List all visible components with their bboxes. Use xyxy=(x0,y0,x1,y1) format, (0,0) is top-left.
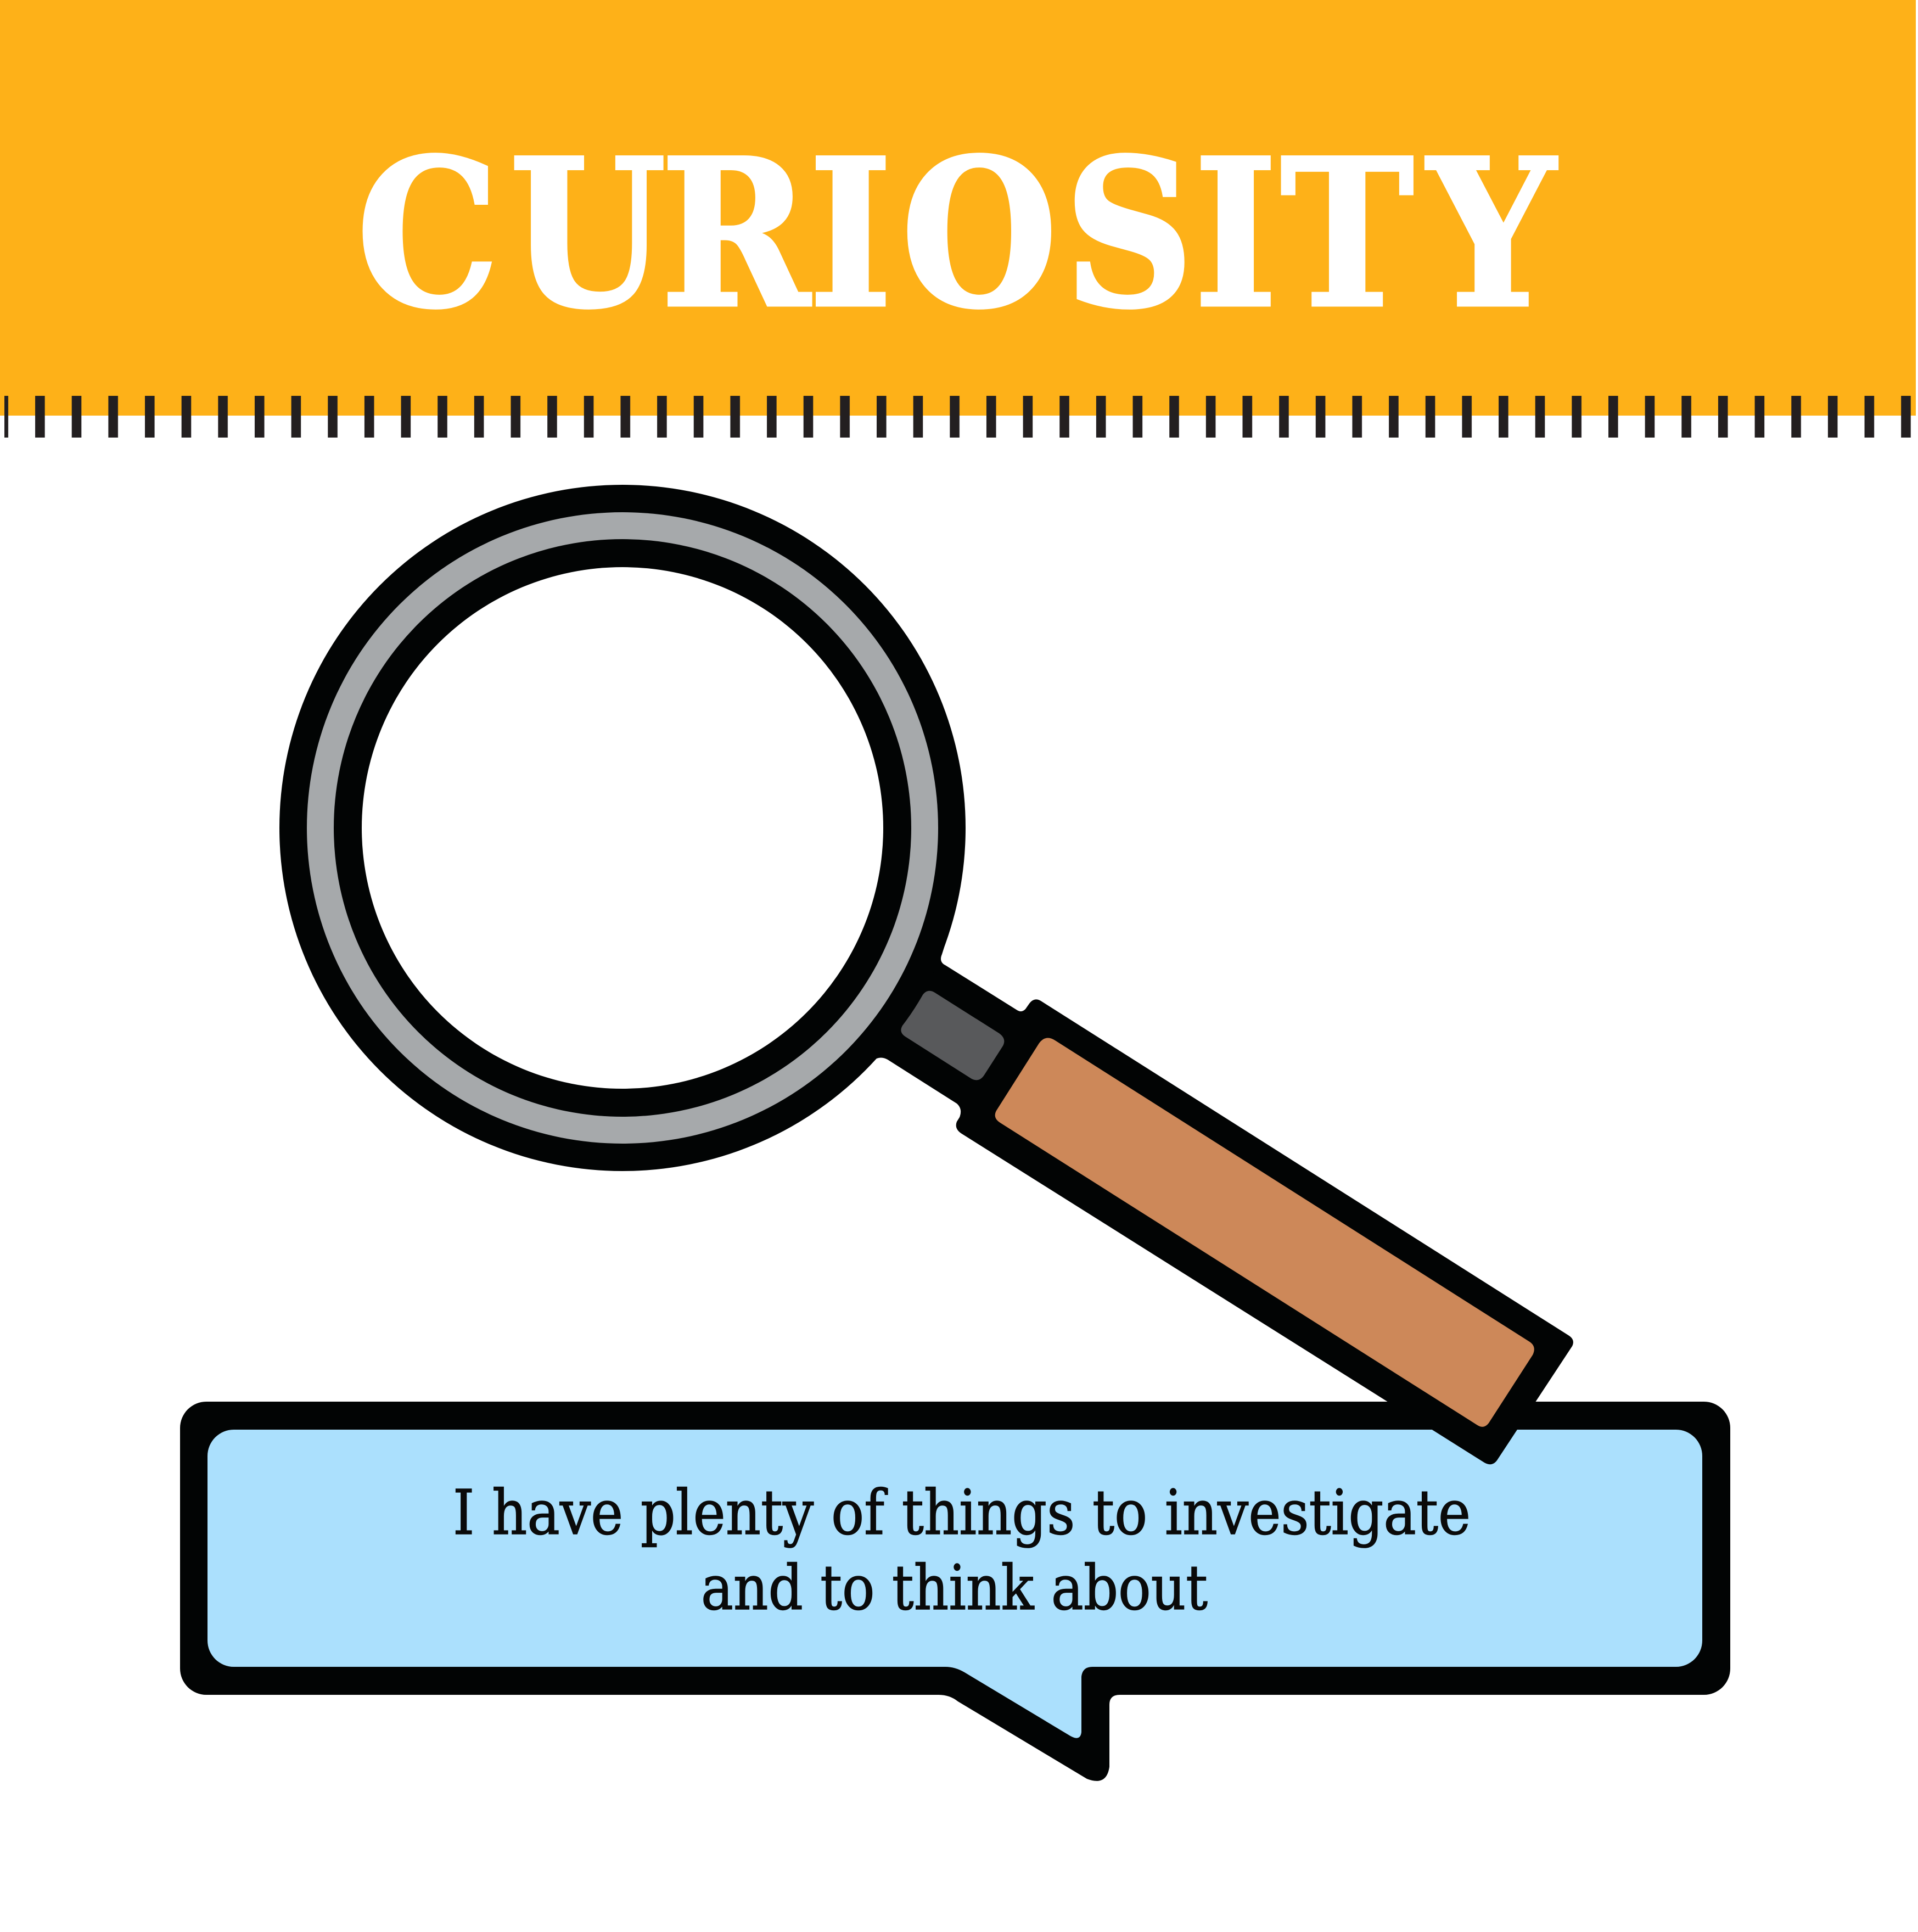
handle outline xyxy=(856,933,1573,1464)
header banner xyxy=(0,0,1916,416)
ferrule xyxy=(901,991,1004,1080)
bubble text line 2: and to think about xyxy=(701,1553,1208,1624)
icon: magnifying glass xyxy=(279,485,1573,1464)
wooden handle xyxy=(995,1038,1534,1427)
speech bubble xyxy=(180,1402,1730,1781)
lens frame outer xyxy=(279,485,966,1171)
bubble fill xyxy=(207,1430,1702,1738)
title: CURIOSITY xyxy=(356,115,1560,354)
lens glass xyxy=(362,567,883,1089)
bubble outline xyxy=(180,1402,1730,1781)
lens inner rim xyxy=(334,539,911,1117)
bubble text line 1: I have plenty of things to investigate xyxy=(453,1477,1471,1549)
lens frame ring xyxy=(307,512,938,1144)
